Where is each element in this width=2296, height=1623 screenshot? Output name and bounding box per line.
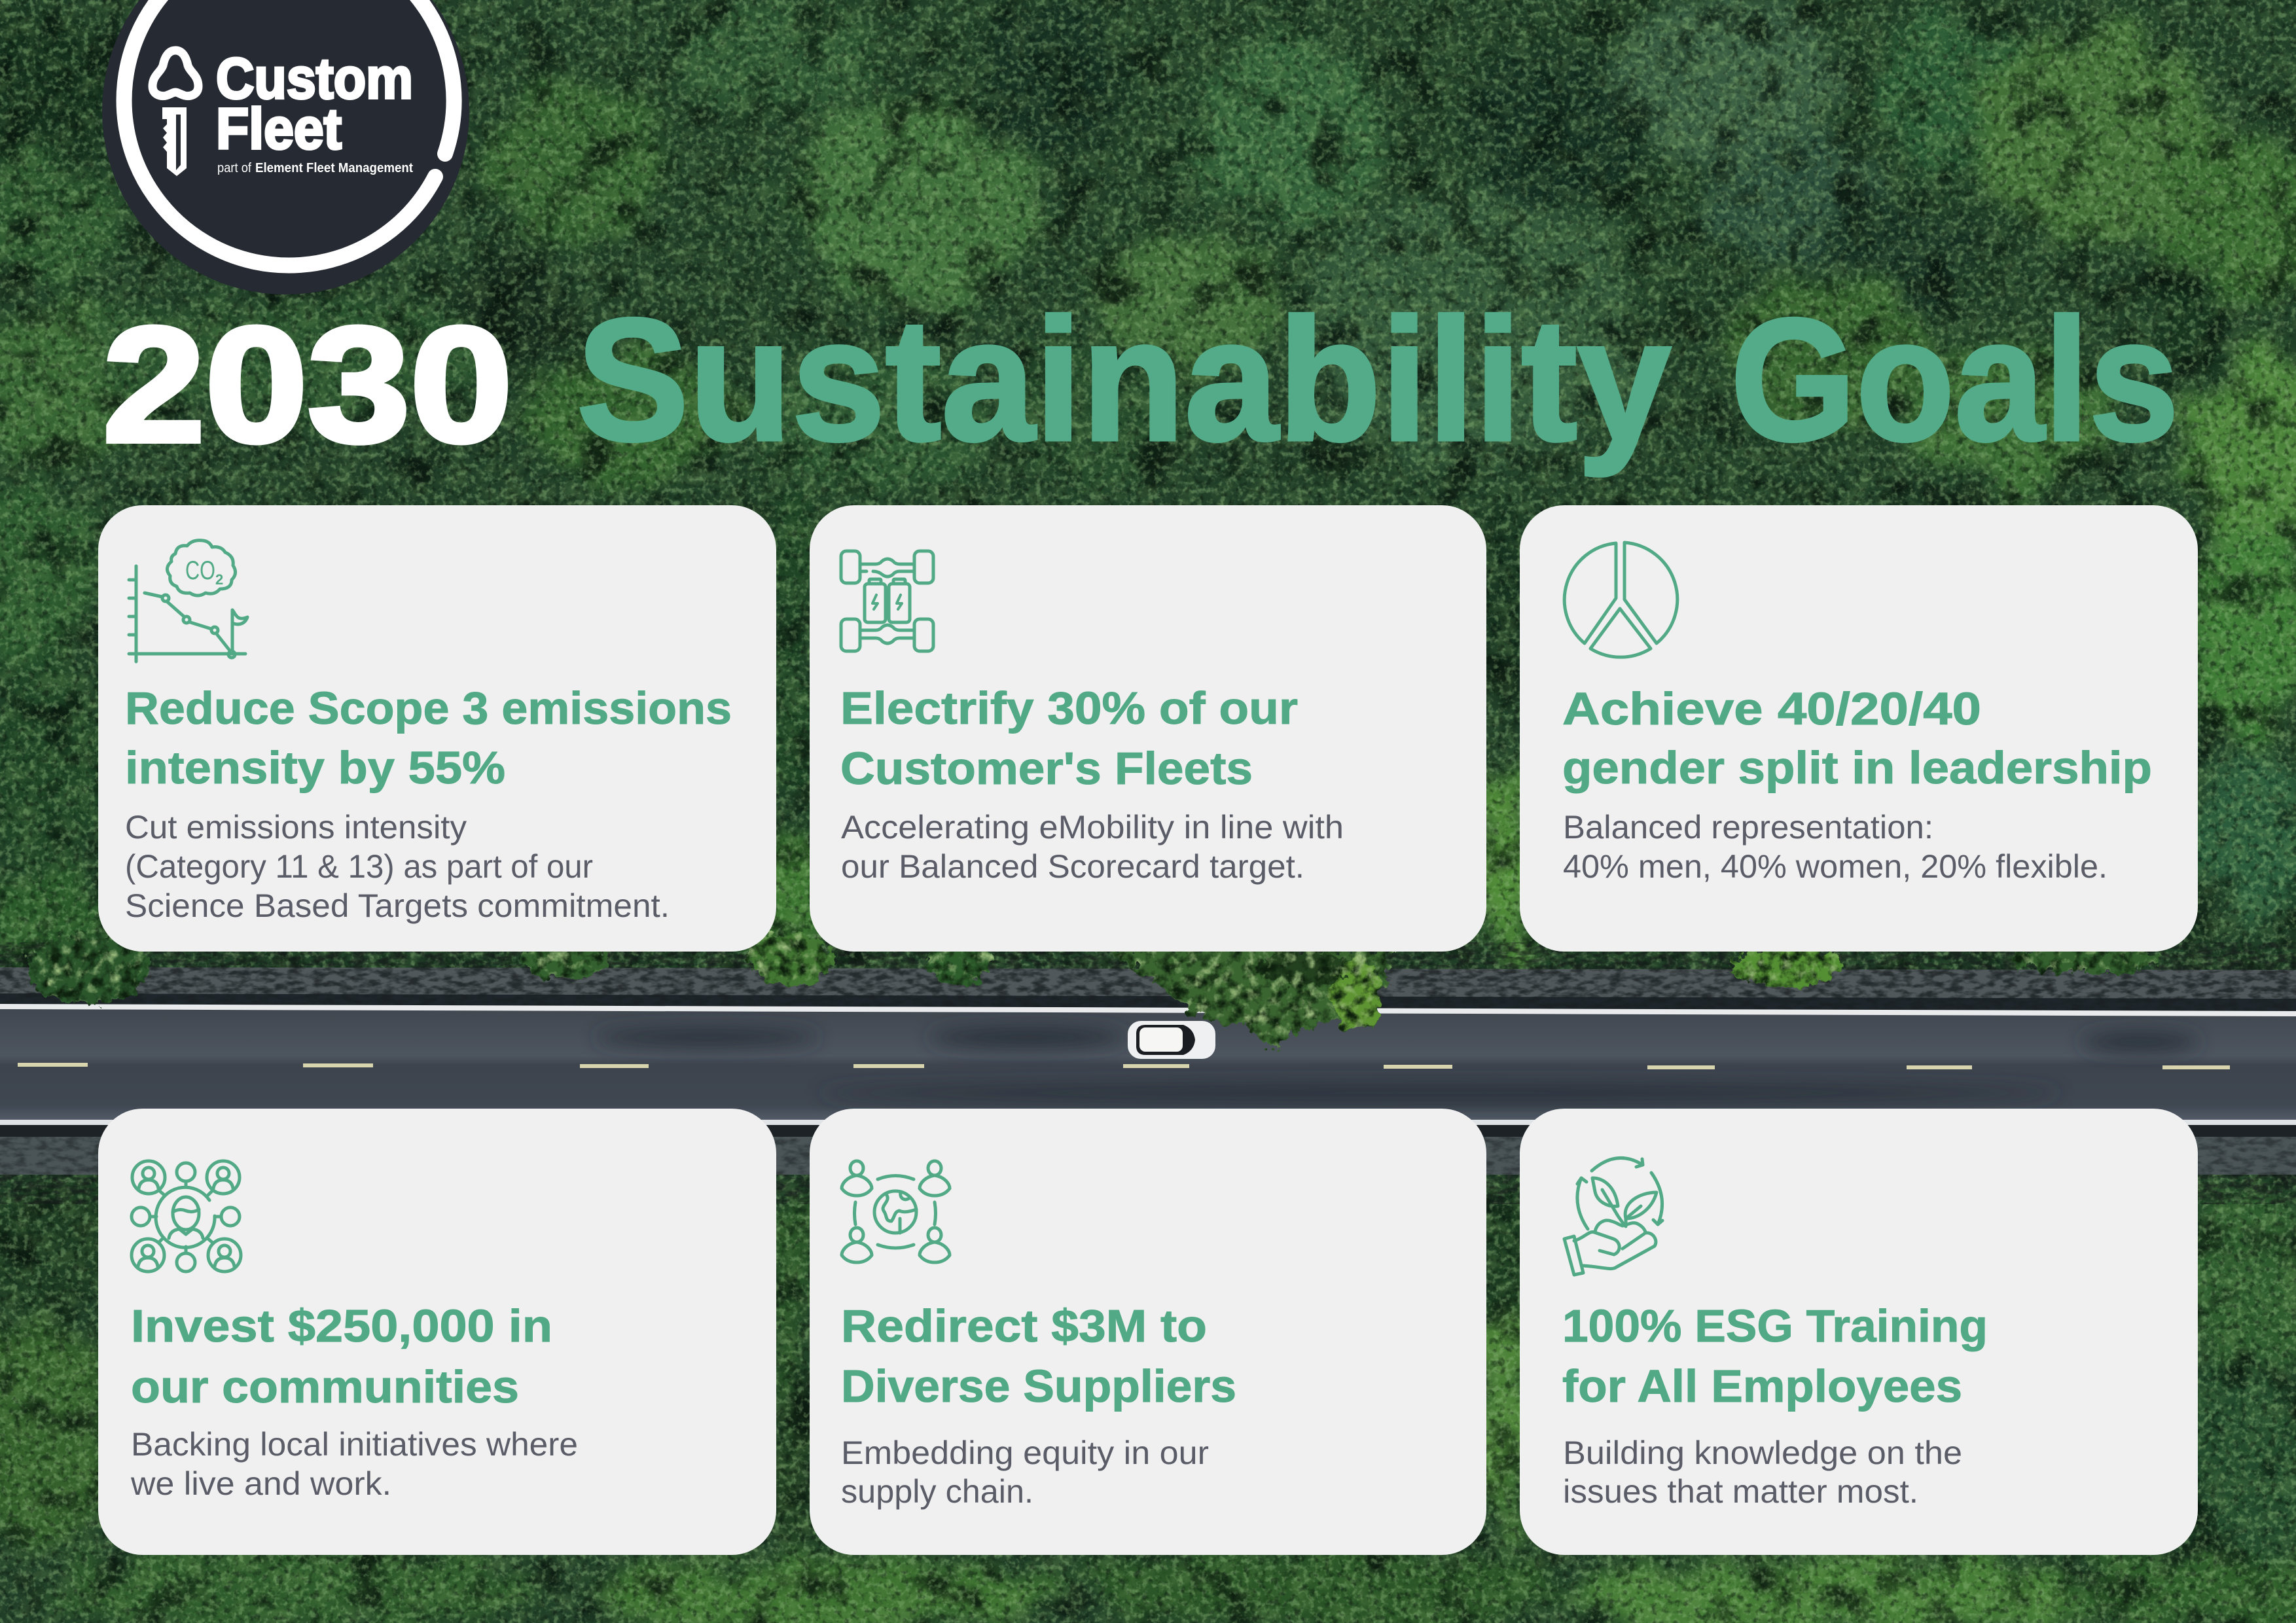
description: we live and work. <box>130 1465 391 1502</box>
heading: Redirect $3M to <box>841 1300 1207 1351</box>
logo wordmark: Custom <box>216 46 413 111</box>
heading <box>125 683 732 793</box>
heading: our communities <box>131 1361 519 1412</box>
icon: three-part circle <box>1564 543 1677 657</box>
description: Science Based Targets commitment. <box>125 887 670 924</box>
logo wordmark: Fleet <box>216 96 342 161</box>
heading <box>131 1300 552 1412</box>
description: Balanced representation: <box>1563 809 1933 846</box>
description: (Category 11 & 13) as part of our <box>125 848 593 885</box>
icon: CO2 reduction chart <box>129 541 247 662</box>
title: 2030 <box>103 293 512 476</box>
heading <box>841 1300 1236 1412</box>
title: Goals <box>1731 283 2179 477</box>
heading: Reduce Scope 3 emissions <box>125 683 732 734</box>
description <box>841 809 1344 885</box>
logo wordmark <box>216 46 413 175</box>
icon: electric chassis with batteries <box>841 551 933 651</box>
heading: Achieve 40/20/40 <box>1562 683 1981 734</box>
icon: hand holding a seedling <box>1564 1158 1662 1275</box>
heading <box>840 683 1298 794</box>
heading: Diverse Suppliers <box>841 1361 1236 1412</box>
panel: community investment <box>98 1109 776 1555</box>
description: Backing local initiatives where <box>131 1426 578 1463</box>
heading: Electrify 30% of our <box>840 683 1298 734</box>
title <box>103 283 2179 478</box>
car on the road <box>1128 1021 1215 1059</box>
heading: for All Employees <box>1562 1361 1962 1412</box>
heading: Invest $250,000 in <box>131 1300 552 1351</box>
heading: 100% ESG Training <box>1562 1300 1988 1351</box>
icon: community network <box>132 1161 241 1272</box>
logo wordmark: Element Fleet Management <box>255 161 413 175</box>
description <box>841 1435 1209 1510</box>
description: Cut emissions intensity <box>125 809 467 846</box>
icon: people around a globe <box>842 1161 950 1262</box>
heading <box>1562 1300 1988 1412</box>
title: Sustainability <box>577 283 1672 478</box>
logo key icon <box>152 50 198 176</box>
panel: ESG training <box>1520 1109 2198 1555</box>
heading: intensity by 55% <box>125 742 505 793</box>
logo badge <box>102 0 469 294</box>
description: supply chain. <box>841 1473 1033 1510</box>
panel: fleet electrification <box>810 505 1486 952</box>
description: Accelerating eMobility in line with <box>841 809 1344 846</box>
logo wordmark: part of <box>217 161 251 175</box>
heading: gender split in leadership <box>1562 742 2152 793</box>
panel: Scope 3 emissions <box>98 505 776 952</box>
panel: diverse suppliers <box>810 1109 1486 1555</box>
description: Building knowledge on the <box>1563 1435 1962 1471</box>
description <box>1563 1435 1962 1510</box>
description: issues that matter most. <box>1563 1473 1918 1510</box>
description: our Balanced Scorecard target. <box>841 848 1304 885</box>
description <box>130 1426 578 1502</box>
heading: Customer's Fleets <box>840 743 1253 794</box>
panel: gender split <box>1520 505 2198 952</box>
description <box>125 809 670 924</box>
heading <box>1562 683 2152 793</box>
description <box>1563 809 2108 885</box>
description: Embedding equity in our <box>841 1435 1209 1471</box>
icon: CO2 reduction chart: CO <box>185 556 215 585</box>
description: 40% men, 40% women, 20% flexible. <box>1563 848 2108 885</box>
icon: CO2 reduction chart: 2 <box>215 571 223 588</box>
